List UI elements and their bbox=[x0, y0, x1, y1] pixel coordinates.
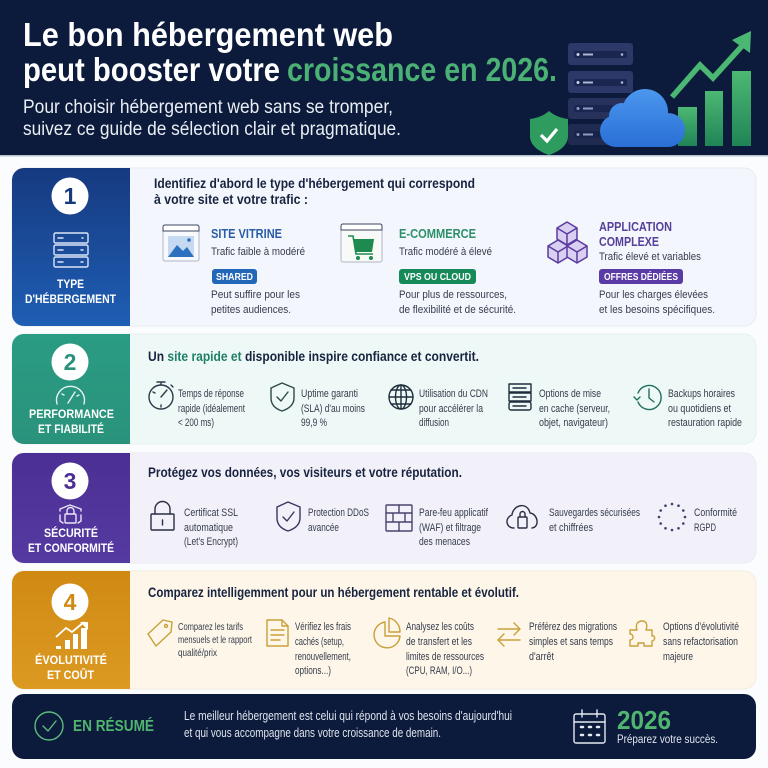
item: migrations: simples et sans temps bbox=[529, 636, 613, 648]
column: e-commerce: de flexibilité et de sécurité. bbox=[399, 304, 516, 316]
icon: pie chart bbox=[374, 618, 400, 648]
column: application complexe: COMPLEXE bbox=[599, 234, 659, 249]
item: cdn: Utilisation du CDN bbox=[419, 388, 488, 400]
column: site vitrine: petites audiences. bbox=[211, 304, 291, 316]
item: frais cachés: Vérifiez les frais bbox=[295, 621, 351, 633]
item: tarifs: mensuels et le rapport bbox=[178, 635, 252, 646]
subtitle: Pour choisir hébergement web sans se tromper, bbox=[23, 96, 393, 118]
column: application complexe: Pour les charges élevées bbox=[599, 289, 708, 301]
icon: shield check bbox=[277, 502, 300, 531]
item: tarifs: Comparez les tarifs bbox=[178, 622, 243, 633]
header banner bbox=[0, 0, 768, 156]
item: temps de réponse: < 200 ms) bbox=[178, 417, 214, 429]
item: tarifs bbox=[148, 620, 252, 659]
column: site vitrine: Trafic faible à modéré bbox=[211, 246, 305, 258]
icon: servers bbox=[54, 233, 88, 267]
item: ddos: avancée bbox=[308, 522, 339, 534]
badge: vps ou cloud: VPS OU CLOUD bbox=[404, 272, 471, 283]
section label: ET CONFORMITÉ bbox=[28, 540, 114, 555]
item: frais cachés: renouvellement, bbox=[295, 651, 351, 663]
icon: padlock bbox=[151, 502, 174, 530]
illustration: cloud bbox=[600, 89, 685, 147]
item: évolutivité bbox=[630, 621, 739, 663]
badge: offres dédiées bbox=[599, 269, 683, 284]
icon: window with cart bbox=[341, 224, 382, 262]
item: rgpd: Conformité bbox=[694, 507, 737, 519]
heading: Un site rapide et disponible inspire confiance et convertit. bbox=[148, 349, 479, 364]
summary bar bbox=[12, 694, 756, 759]
item: évolutivité: Options d'évolutivité bbox=[663, 621, 739, 633]
column: application complexe: APPLICATION bbox=[599, 219, 672, 234]
item: waf: (WAF) et filtrage bbox=[419, 522, 481, 534]
item: coûts de transfert: (CPU, RAM, I/O...) bbox=[406, 665, 472, 677]
section label: PERFORMANCE bbox=[29, 407, 114, 421]
item: cache: en cache (serveur, bbox=[539, 403, 610, 415]
step number 1 bbox=[52, 178, 88, 214]
badge: shared bbox=[212, 269, 257, 284]
step number 2: 2 bbox=[64, 349, 76, 375]
item: migrations: d'arrêt bbox=[529, 651, 554, 663]
year callout: 2026 bbox=[617, 705, 671, 735]
icon: cache stack bbox=[509, 384, 531, 410]
icon: gauge bbox=[57, 386, 84, 404]
item: frais cachés bbox=[267, 620, 351, 677]
step number 4 bbox=[52, 584, 88, 620]
item: coûts de transfert: Analysez les coûts bbox=[406, 621, 474, 633]
column: site vitrine bbox=[163, 225, 305, 316]
section label: TYPE bbox=[57, 277, 84, 291]
label: en résumé: EN RÉSUMÉ bbox=[73, 716, 154, 735]
item: waf: Pare-feu applicatif bbox=[419, 507, 489, 519]
item: backups: Backups horaires bbox=[668, 388, 735, 400]
item: migrations bbox=[498, 621, 617, 663]
item: temps de réponse bbox=[149, 382, 245, 429]
step number 3: 3 bbox=[64, 468, 76, 494]
icon: globe bbox=[389, 385, 413, 409]
panel 2: performance et fiabilité bbox=[12, 334, 756, 444]
section label bbox=[25, 277, 117, 306]
column: e-commerce bbox=[341, 224, 516, 316]
item: migrations: Préférez des migrations bbox=[529, 621, 617, 633]
icon: rising bars bbox=[56, 622, 88, 649]
item: cache: Options de mise bbox=[539, 388, 601, 400]
item: uptime: 99,9 % bbox=[301, 417, 327, 429]
item: coûts de transfert bbox=[374, 618, 484, 677]
item: frais cachés: options...) bbox=[295, 665, 331, 677]
summary text: et qui vous accompagne dans votre croissance de demain. bbox=[184, 726, 441, 740]
badge: vps ou cloud bbox=[399, 269, 476, 284]
item: ddos bbox=[277, 502, 369, 534]
icon: cubes bbox=[548, 222, 587, 263]
section label: ET FIABILITÉ bbox=[38, 421, 104, 436]
column: site vitrine: Peut suffire pour les bbox=[211, 289, 300, 301]
icon: price tag bbox=[148, 620, 172, 646]
illustration: shield bbox=[530, 111, 568, 155]
icon: history clock bbox=[634, 385, 661, 410]
icon: brick wall bbox=[386, 505, 412, 531]
item: sauvegardes bbox=[507, 506, 640, 534]
step number 3 bbox=[52, 462, 88, 500]
item: ddos: Protection DDoS bbox=[308, 507, 369, 519]
item: ssl: (Let's Encrypt) bbox=[184, 536, 238, 548]
icon: swap arrows bbox=[498, 623, 520, 646]
heading bbox=[154, 176, 475, 207]
subtitle bbox=[23, 96, 401, 140]
icon: document bbox=[267, 620, 288, 646]
badge: offres dédiées: OFFRES DÉDIÉES bbox=[604, 270, 678, 283]
item: rgpd: RGPD bbox=[694, 522, 716, 534]
panel 1: type d'hébergement bbox=[12, 168, 756, 326]
column: e-commerce: Trafic modéré à élevé bbox=[399, 246, 492, 258]
item: sauvegardes: Sauvegardes sécurisées bbox=[549, 507, 640, 519]
item: temps de réponse: rapide (idéalement bbox=[178, 403, 245, 415]
icon: ring of stars bbox=[658, 503, 686, 531]
item: waf bbox=[386, 505, 489, 548]
badge: shared: SHARED bbox=[216, 272, 253, 283]
item: cache bbox=[509, 384, 610, 429]
subtitle: suivez ce guide de sélection clair et pragmatique. bbox=[23, 118, 401, 140]
item: cache: objet, navigateur) bbox=[539, 417, 608, 429]
year callout bbox=[617, 705, 718, 746]
step number 4: 4 bbox=[64, 589, 77, 615]
item: backups: restauration rapide bbox=[668, 417, 742, 429]
title: peut booster votre bbox=[23, 51, 280, 88]
section label: ET COÛT bbox=[47, 667, 95, 682]
icon: shield lock bbox=[60, 505, 81, 523]
section label bbox=[28, 525, 114, 555]
illustration: server rack bbox=[568, 43, 633, 145]
icon: cloud lock bbox=[507, 506, 537, 528]
icon: puzzle bbox=[630, 621, 655, 646]
heading: à votre site et votre trafic : bbox=[154, 192, 308, 207]
item: temps de réponse: Temps de réponse bbox=[178, 388, 244, 400]
heading: Identifiez d'abord le type d'hébergement qui correspond bbox=[154, 176, 475, 191]
column: site vitrine: SITE VITRINE bbox=[211, 226, 282, 241]
column: application complexe: Trafic élevé et variables bbox=[599, 251, 701, 263]
title bbox=[23, 16, 557, 88]
item: backups bbox=[634, 385, 742, 429]
section label: D'HÉBERGEMENT bbox=[25, 291, 117, 306]
item: uptime bbox=[271, 383, 365, 429]
title: croissance en 2026. bbox=[287, 51, 557, 88]
item: sauvegardes: et chiffrées bbox=[549, 522, 593, 534]
column: e-commerce: E-COMMERCE bbox=[399, 226, 476, 241]
section label bbox=[35, 652, 107, 682]
section label: ÉVOLUTIVITÉ bbox=[35, 652, 107, 667]
item: cdn: diffusion bbox=[419, 417, 449, 429]
icon: check circle bbox=[35, 712, 63, 740]
item: évolutivité: majeure bbox=[663, 651, 693, 663]
icon: calendar bbox=[574, 710, 605, 743]
item: frais cachés: cachés (setup, bbox=[295, 636, 344, 648]
heading: Comparez intelligemment pour un hébergement rentable et évolutif. bbox=[148, 585, 519, 600]
year callout: Préparez votre succès. bbox=[617, 734, 718, 746]
item: coûts de transfert: limites de ressources bbox=[406, 651, 484, 663]
panel 4: évolutivité et coût bbox=[12, 571, 756, 689]
summary text: Le meilleur hébergement est celui qui répond à vos besoins d'aujourd'hui bbox=[184, 709, 512, 723]
item: coûts de transfert: de transfert et les bbox=[406, 636, 472, 648]
step number 2 bbox=[52, 344, 88, 380]
item: ssl: automatique bbox=[184, 522, 233, 534]
summary text bbox=[184, 709, 512, 740]
item: évolutivité: sans refactorisation bbox=[663, 636, 738, 648]
item: rgpd bbox=[658, 503, 737, 534]
section label bbox=[29, 407, 114, 436]
column: e-commerce: Pour plus de ressources, bbox=[399, 289, 507, 301]
step number 1: 1 bbox=[64, 183, 77, 209]
item: waf: des menaces bbox=[419, 536, 470, 548]
icon: shield check bbox=[271, 383, 294, 411]
title: Le bon hébergement web bbox=[23, 16, 393, 53]
illustration: growth bars and arrow bbox=[672, 31, 751, 146]
column: application complexe bbox=[548, 219, 715, 316]
item: cdn bbox=[389, 385, 488, 429]
item: tarifs: qualité/prix bbox=[178, 648, 217, 659]
column: application complexe: et les besoins spécifiques. bbox=[599, 304, 715, 316]
panel 3: sécurité et conformité bbox=[12, 453, 756, 563]
item: uptime: Uptime garanti bbox=[301, 388, 358, 400]
item: uptime: (SLA) d'au moins bbox=[301, 403, 365, 415]
section label: SÉCURITÉ bbox=[44, 525, 98, 540]
item: backups: ou quotidiens et bbox=[668, 403, 731, 415]
icon: stopwatch bbox=[149, 382, 173, 409]
item: ssl bbox=[151, 502, 238, 548]
item: ssl: Certificat SSL bbox=[184, 507, 238, 519]
item: cdn: pour accélérer la bbox=[419, 403, 484, 415]
icon: window with image bbox=[163, 225, 199, 261]
heading: Protégez vos données, vos visiteurs et votre réputation. bbox=[148, 465, 462, 480]
